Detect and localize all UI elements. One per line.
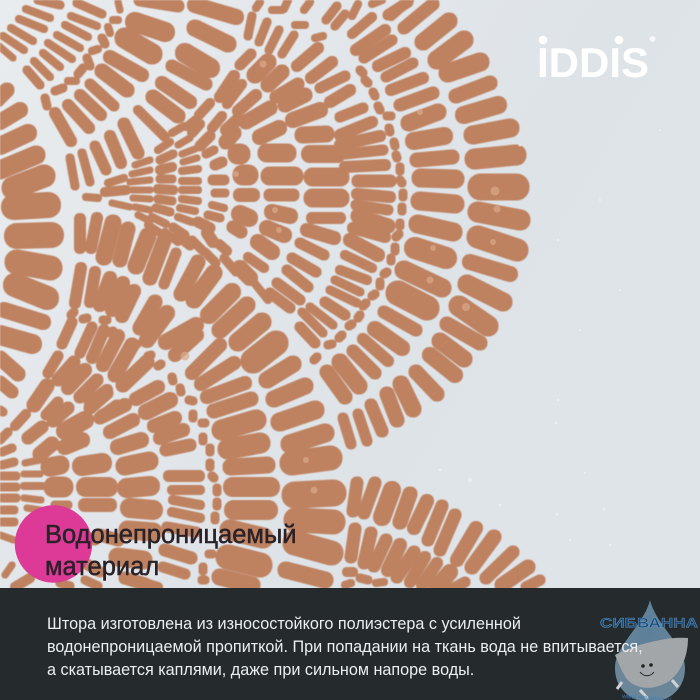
title — [45, 521, 297, 581]
pink circle — [15, 505, 92, 583]
fan pattern: upper left fan — [0, 0, 236, 186]
description text: водонепроницаемой пропиткой. При попадании на ткань вода не впитывается, — [47, 638, 643, 656]
description text — [47, 615, 643, 679]
fan pattern: large central fan — [86, 0, 520, 444]
watermark: Сибванна bath in drop: СИБВАННА — [600, 616, 698, 630]
description text: Штора изготовлена из износостойкого полиэстера с усиленной — [47, 615, 521, 633]
title: Водонепроницаемый — [45, 521, 297, 549]
dark text band — [0, 588, 700, 700]
description text: а скатывается каплями, даже при сильном напоре воды. — [47, 661, 474, 679]
logo: IDDIS: IDDIS — [537, 39, 649, 86]
water droplets on fabric — [180, 60, 661, 546]
title: материал — [45, 553, 159, 581]
fan pattern: lower left fan — [0, 218, 333, 587]
fan pattern: bottom fan — [345, 483, 540, 590]
fan pattern: left edge big petals — [0, 90, 51, 412]
watermark: Сибванна bath in drop — [600, 600, 698, 700]
